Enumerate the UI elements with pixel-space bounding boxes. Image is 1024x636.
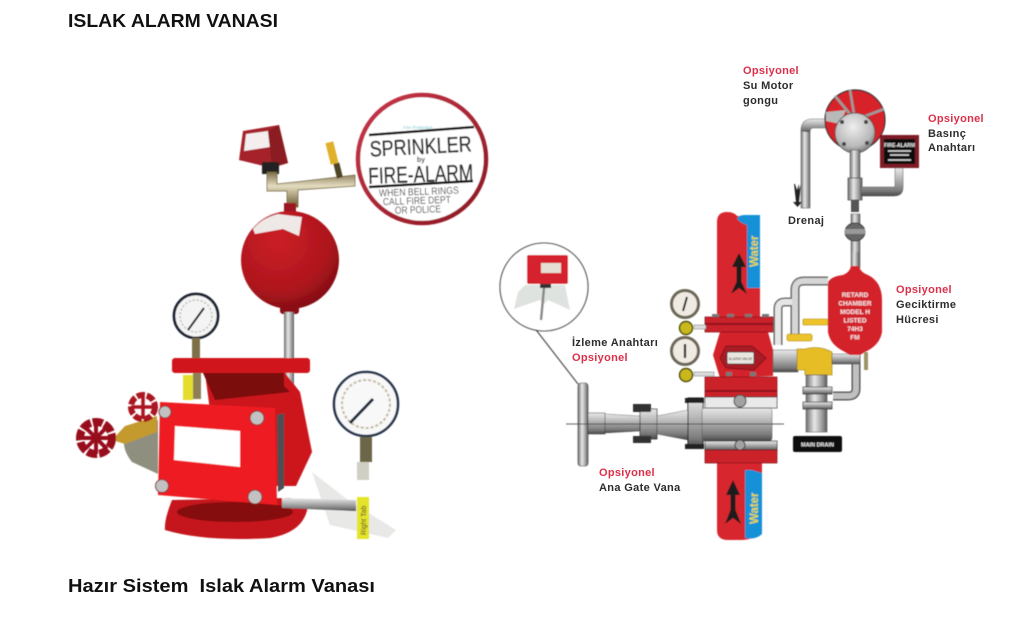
photo: assembled wet alarm valve <box>80 95 486 539</box>
pressure switch box: FIRE-ALARM <box>884 143 915 149</box>
label: water motor gong <box>743 65 799 107</box>
label: pressure switch: Anahtarı <box>928 142 975 154</box>
pressure switch <box>239 125 288 174</box>
lower pipe red <box>717 462 762 540</box>
label: monitoring switch: Opsiyonel <box>572 352 628 364</box>
pressure switch pipe <box>861 168 903 196</box>
label: retard chamber <box>896 284 956 326</box>
retard chamber: LISTED <box>843 318 867 324</box>
lower pipe blue water <box>745 470 762 538</box>
label: retard chamber: Opsiyonel <box>896 284 952 296</box>
alarm bell sign: SPRINKLER <box>369 131 472 162</box>
label: water motor gong: gongu <box>743 95 778 107</box>
retard chamber: CHAMBER <box>838 300 872 308</box>
valve housing back <box>205 373 312 486</box>
yellow valve handles <box>787 319 828 341</box>
alarm bell sign: Fire Protection <box>403 125 433 130</box>
valve stem tag <box>183 372 294 406</box>
left pressure gauge <box>174 294 218 358</box>
lower arrow glyph <box>725 480 741 524</box>
alarm bell sign: FIRE-ALARM <box>368 159 474 189</box>
valve housing shadow <box>203 373 290 400</box>
label: retard chamber: Hücresi <box>896 314 939 326</box>
label: main gate valve: Opsiyonel <box>599 467 655 479</box>
alarm valve body: ALARM VALVE <box>729 357 753 361</box>
base shadow <box>177 502 293 522</box>
gate valve <box>566 383 784 466</box>
upper pipe red <box>717 212 760 318</box>
drain pipe and yellow tag <box>282 462 396 539</box>
label: water motor gong: Opsiyonel <box>743 65 799 77</box>
right pressure gauge <box>334 372 398 462</box>
valve side strip <box>277 413 284 492</box>
main drain plate <box>793 436 842 452</box>
callout leader line <box>533 326 578 384</box>
upper water label: Water <box>749 235 761 267</box>
label: pressure switch: Basınç <box>928 128 966 140</box>
drain arrow <box>793 184 802 207</box>
label: main gate valve <box>599 467 681 494</box>
retard chamber: FM <box>850 334 860 342</box>
trim piping <box>778 281 856 396</box>
label: pressure switch: Opsiyonel <box>928 113 984 125</box>
title: ISLAK ALARM VANASI <box>68 11 278 31</box>
main drain plate: MAIN DRAIN <box>801 442 834 448</box>
technical diagram <box>500 90 919 540</box>
upper flow arrow <box>731 253 747 294</box>
valve body front <box>158 402 277 505</box>
upper pipe blue water <box>737 215 760 288</box>
white nameplate <box>174 426 240 467</box>
alarm bell sign: WHEN BELL RINGS <box>379 186 459 199</box>
label: drain: Drenaj <box>788 215 824 227</box>
brass pipe manifold <box>267 141 355 207</box>
drain line <box>801 119 828 208</box>
alarm bell sign: OR POLICE <box>395 204 441 217</box>
callout: monitoring switch <box>500 243 588 331</box>
alarm valve body <box>705 314 777 397</box>
label: monitoring switch <box>572 336 658 364</box>
retard chamber: MODEL H <box>840 309 870 316</box>
drain valve outlet <box>803 354 860 432</box>
top flange <box>172 358 310 373</box>
pressure switch box <box>880 135 919 168</box>
alarm bell sign: CALL FIRE DEPT <box>383 195 451 208</box>
label: retard chamber: Geciktirme <box>896 299 956 311</box>
retard chamber: RETARD <box>842 292 869 299</box>
main drain connection <box>773 350 798 372</box>
lower water label: Water <box>749 492 761 524</box>
label: water motor gong: Su Motor <box>743 80 794 92</box>
label: pressure switch <box>928 113 984 154</box>
photo caption: Hazır Sistem Islak Alarm Vanası <box>68 576 375 596</box>
gauges <box>672 290 714 382</box>
alarm bell sign <box>358 95 486 223</box>
retard chamber sphere <box>241 203 339 362</box>
yellow drain valve <box>797 348 832 375</box>
handwheels and brass drain valve <box>80 395 158 474</box>
alarm bell sign: by <box>417 157 425 164</box>
retard chamber <box>828 252 882 370</box>
body bolts <box>156 406 264 504</box>
vertical water motor pipe <box>845 150 865 268</box>
base flange <box>165 498 308 539</box>
label: monitoring switch: İzleme Anahtarı <box>572 336 658 349</box>
retard chamber: 74H3 <box>847 326 863 333</box>
water motor gong <box>825 90 885 153</box>
drain pipe and yellow tag: Right Tab <box>361 505 368 535</box>
label: main gate valve: Ana Gate Vana <box>599 482 681 494</box>
